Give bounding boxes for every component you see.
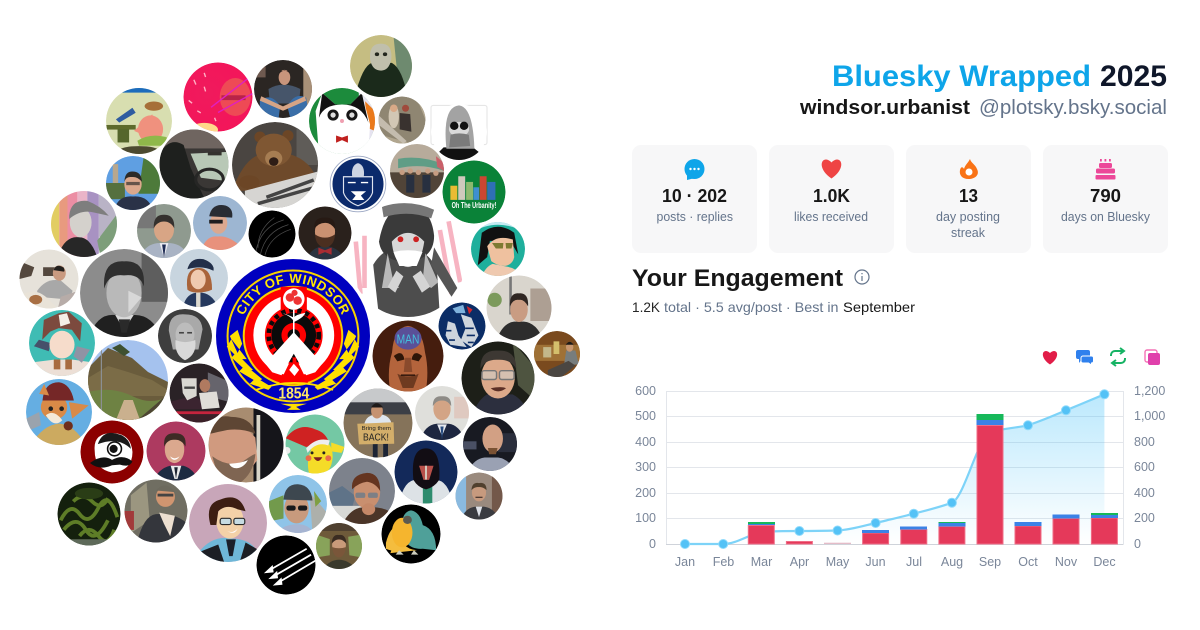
avatar: Kronk with sunglasses [471,222,525,276]
left axis labels: 600 [635,384,656,398]
icon: heart [822,160,841,178]
right axis labels: 600 [1134,460,1155,474]
handle line [799,97,1167,119]
avatar: Oh The Urbanity logo: Oh The Urbanity! [452,201,496,210]
avatar: black and white vintage portrait [80,249,168,337]
avatar: man with glasses selfie [462,342,534,414]
engagement summary [632,299,915,315]
month labels: Sep [979,555,1001,569]
avatar: MAN face poster [372,320,444,392]
seal text: founding year: 1854 [278,385,310,402]
avatar: kids playing on climbing frame [378,96,426,144]
title: Bluesky Wrapped [832,60,1091,93]
panel: days on Bluesky stat: days on Bluesky [1061,210,1151,224]
avatar: man in produce aisle [316,523,362,569]
avatar: black generative lines [248,210,296,258]
panel: days on Bluesky stat [1043,145,1168,253]
chart legend [1043,348,1160,366]
left axis labels: 100 [635,511,656,525]
avatar: man in cap on rainbow [51,191,117,257]
avatar: man with sunglasses resting chin [329,458,395,524]
chart: engagement by month [635,384,1165,569]
cumulative points [680,390,1109,548]
avatar: pink laser portrait [184,62,252,137]
month labels: Aug [941,555,963,569]
icon: birthday cake [1096,159,1116,180]
avatar: hooded masked figure [431,104,487,160]
avatar: group under awning [390,144,444,199]
panel: likes stat: 1.0K [813,186,850,206]
avatar: bearded old man portrait [158,309,212,363]
month labels: Jan [675,555,695,569]
avatar: three arrows logo [256,536,316,594]
left axis labels: 200 [635,486,656,500]
handle line: @plotsky.bsky.social [979,97,1167,119]
panel: likes stat: likes received [794,210,868,224]
month labels: Feb [713,555,734,569]
month labels: Jul [906,555,922,569]
engagement summary: September [843,299,915,315]
panel: posts and replies stat: posts · replies [656,210,733,224]
heading: Your Engagement: Your Engagement [632,265,843,292]
handle line: windsor.urbanist [799,97,970,119]
avatar: anime character on teal [29,310,95,376]
avatar: cyclist with helmet [269,475,327,533]
icon: replies legend [1076,350,1094,365]
avatar: blue and yellow macaw [382,504,440,564]
avatar: protester with sign: BACK! [363,432,389,443]
icon: likes legend [1043,351,1057,364]
avatar: grinning bearded man [208,408,284,482]
avatar: man in grey blazer [124,480,188,542]
icon: info [855,270,869,284]
avatar: protester with sign [344,388,412,459]
title: 2025 [1100,60,1167,93]
avatar: Oh The Urbanity logo [442,160,506,224]
icon: flame [960,159,978,179]
month labels: Jun [865,555,886,569]
panel: avatar bubble cluster [20,35,580,594]
avatar: navy anvil crest [329,155,387,213]
month labels: Apr [790,555,809,569]
panel: posts and replies stat: 10 · 202 [662,186,727,206]
month labels: Mar [751,555,772,569]
avatar: bear reading newspaper [232,122,322,208]
right axis labels: 1,200 [1134,384,1165,398]
avatar: Blue Jays illustration [438,302,486,350]
icon: quotes legend [1145,350,1160,365]
avatar: man sitting on steps [254,60,315,118]
icon: reposts legend [1111,348,1125,366]
avatar: Patrick with hammer [106,88,172,155]
left axis labels: 500 [635,409,656,423]
avatar: cartoon cat with bow tie [309,88,375,154]
left axis labels: 300 [635,460,656,474]
cumulative line [685,394,1104,544]
avatar: hooded Revan figure [394,440,458,504]
avatar: painted woman in beret [170,249,228,307]
avatar: car interior [160,130,228,199]
left axis labels: 400 [635,435,656,449]
right axis labels: 0 [1134,537,1141,551]
right axis labels: 400 [1134,486,1155,500]
panel: days on Bluesky stat: 790 [1090,186,1121,206]
panel: likes stat [769,145,894,253]
avatar: man with bookshelf [486,276,553,340]
avatar: man with dog [19,250,78,308]
right axis labels: 200 [1134,511,1155,525]
avatar: man with cap and sunglasses [193,196,247,250]
month labels: Dec [1093,555,1116,569]
engagement summary: 1.2K [632,299,661,315]
month labels: Nov [1055,555,1078,569]
avatar: cartoon fox with pipe [26,379,92,445]
avatar: protester with sign: Bring them [362,426,391,432]
avatar: cliffside path [88,340,168,420]
left axis labels: 0 [649,537,656,551]
avatar: smiling man outdoors [106,156,160,210]
icon: chat bubble [684,159,704,180]
stacked bars [748,414,1118,544]
avatar: cartoon man with glasses [189,484,267,562]
avatar: MAN face poster: MAN [397,332,419,347]
avatar: smiling man in suit on maroon [146,422,206,480]
avatar: mossy Cthulhu artwork [58,482,120,546]
panel: posting streak stat: day posting [936,210,1000,224]
left axis labels [635,384,656,551]
avatar: crowd with masked face [170,364,228,423]
right axis labels: 800 [1134,435,1155,449]
avatar: sketched anime figure [350,201,466,317]
right axis labels [1134,384,1165,551]
month labels [675,555,1116,569]
seal text: CITY OF WINDSOR: CITY OF WINDSOR [237,274,349,315]
panel: posts and replies stat [632,145,757,253]
avatar: owl icon [350,35,412,97]
panel: posting streak stat: streak [951,226,986,240]
avatar: man in suit at white house [137,204,191,258]
avatar: Pikachu with Santa hat [283,414,344,474]
month labels: Oct [1018,555,1038,569]
month labels: May [826,555,850,569]
avatar: bearded man with red bow tie [298,206,352,260]
avatar: bald man with goatee [463,417,517,471]
avatar: man in wood-panelled train [534,331,580,377]
avatar: City of Windsor seal [216,259,370,413]
panel: posting streak stat: 13 [959,186,978,206]
engagement summary: total · 5.5 avg/post · Best in [664,299,838,315]
avatar: Natty Boh logo [80,420,144,484]
avatar: man in dark suit [415,386,469,440]
avatar: man with moustache in tweed [456,472,502,520]
cumulative area [685,394,1104,544]
panel: posting streak stat [906,145,1031,253]
right axis labels: 1,000 [1134,409,1165,423]
